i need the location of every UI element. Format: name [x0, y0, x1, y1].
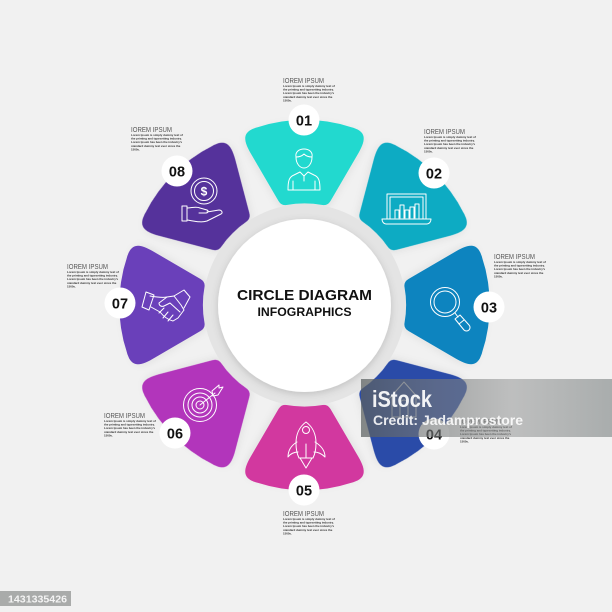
watermark logo: iStock	[372, 386, 432, 412]
text block 03: IOREM IPSUM	[494, 254, 535, 261]
text block 07: the printing and typesetting industry.	[67, 274, 118, 278]
text block 06: 1500s.	[104, 433, 113, 437]
text block 01: 1500s.	[283, 98, 292, 102]
panel: segment 07	[119, 246, 205, 364]
text block 07: 1500s.	[67, 284, 76, 288]
number badge 03: 03	[481, 300, 497, 316]
text block 01: the printing and typesetting industry.	[283, 88, 334, 92]
text block 02: standard dummy text ever since the	[424, 146, 474, 150]
number badge 01	[288, 104, 320, 136]
number badge 04: 04	[426, 428, 442, 444]
icon: house	[388, 382, 420, 417]
text block 01: standard dummy text ever since the	[283, 95, 333, 99]
icon: handshake	[142, 290, 190, 321]
panel: segment 04	[333, 334, 477, 478]
panel: segment 05	[245, 405, 364, 490]
text block 01: Lorem Ipsum is simply dummy text of	[283, 84, 335, 88]
text block 06: the printing and typesetting industry.	[104, 423, 155, 427]
text block 05	[283, 511, 335, 535]
subtitle: INFOGRAPHICS	[258, 307, 352, 319]
text block 04	[460, 419, 512, 443]
title: CIRCLE DIAGRAM	[237, 287, 372, 304]
text block 03	[494, 254, 546, 278]
panel: segment 08	[132, 132, 276, 276]
text block 04: 1500s.	[460, 439, 469, 443]
text block 02: 1500s.	[424, 149, 433, 153]
text block 05: standard dummy text ever since the	[283, 528, 333, 532]
watermark credit: Credit: Jadamprostore	[373, 413, 523, 428]
number badge 07	[104, 288, 136, 318]
icon: magnifier	[430, 288, 470, 331]
icon: rocket	[288, 422, 325, 468]
number badge 08	[162, 156, 192, 186]
icon: laptop chart	[382, 194, 431, 224]
text block 02: IOREM IPSUM	[424, 129, 465, 136]
text block 03: the printing and typesetting industry.	[494, 264, 545, 268]
centre ring	[204, 204, 406, 406]
text block 04: IOREM IPSUM	[460, 419, 501, 426]
watermark band	[361, 379, 612, 437]
text block 08: IOREM IPSUM	[131, 127, 172, 134]
text block 05: IOREM IPSUM	[283, 511, 324, 518]
text block 04: Lorem Ipsum is simply dummy text of	[460, 425, 512, 429]
number badge 08: 08	[169, 164, 185, 180]
text block 06: Lorem Ipsum has been the industry's	[104, 426, 156, 430]
number badge 05	[288, 474, 320, 506]
number badge 03	[474, 292, 504, 322]
icon: coin in hand	[182, 178, 222, 222]
text block 07: Lorem Ipsum is simply dummy text of	[67, 270, 119, 274]
text block 03: standard dummy text ever since the	[494, 271, 544, 275]
text block 08: Lorem Ipsum has been the industry's	[131, 140, 183, 144]
text block 02: Lorem Ipsum is simply dummy text of	[424, 135, 476, 139]
text block 01	[283, 78, 335, 102]
text block 08: Lorem Ipsum is simply dummy text of	[131, 133, 183, 137]
text block 07	[67, 264, 119, 288]
text block 05: Lorem Ipsum is simply dummy text of	[283, 517, 335, 521]
text block 02: the printing and typesetting industry.	[424, 139, 475, 143]
panel: segment 02	[333, 132, 477, 276]
image id tag	[0, 591, 71, 606]
text block 01: Lorem Ipsum has been the industry's	[283, 91, 335, 95]
number badge 01: 01	[296, 114, 312, 130]
centre circle	[218, 219, 391, 392]
icon: target	[184, 385, 223, 422]
text block 07: IOREM IPSUM	[67, 264, 108, 271]
text block 05: the printing and typesetting industry.	[283, 521, 334, 525]
text block 07: standard dummy text ever since the	[67, 281, 117, 285]
number badge 05: 05	[296, 484, 312, 500]
number badge 02	[418, 158, 450, 188]
panel: segment 06	[132, 334, 276, 478]
text block 04: the printing and typesetting industry.	[460, 429, 511, 433]
text block 06: Lorem Ipsum is simply dummy text of	[104, 419, 156, 423]
text block 03: Lorem Ipsum has been the industry's	[494, 267, 546, 271]
text block 06: standard dummy text ever since the	[104, 430, 154, 434]
image id tag: 1431335426	[8, 594, 67, 606]
text block 01: IOREM IPSUM	[283, 78, 324, 85]
text block 02	[424, 129, 476, 153]
number badge 07: 07	[112, 296, 128, 312]
number badge 06: 06	[167, 426, 183, 442]
text block 03: Lorem Ipsum is simply dummy text of	[494, 260, 546, 264]
text block 08: the printing and typesetting industry.	[131, 137, 182, 141]
text block 03: 1500s.	[494, 274, 503, 278]
text block 04: standard dummy text ever since the	[460, 436, 510, 440]
panel: segment 03	[404, 246, 490, 364]
text block 08: standard dummy text ever since the	[131, 144, 181, 148]
icon: dollar sign: $	[201, 184, 208, 198]
text block 05: Lorem Ipsum has been the industry's	[283, 524, 335, 528]
text block 07: Lorem Ipsum has been the industry's	[67, 277, 119, 281]
number badge 02: 02	[426, 166, 442, 182]
text block 06: IOREM IPSUM	[104, 413, 145, 420]
text block 06	[104, 413, 156, 437]
text block 05: 1500s.	[283, 531, 292, 535]
number badge 06	[160, 418, 190, 448]
text block 02: Lorem Ipsum has been the industry's	[424, 142, 476, 146]
icon: person	[288, 149, 320, 190]
text block 08: 1500s.	[131, 147, 140, 151]
number badge 04	[418, 418, 450, 450]
text block 08	[131, 127, 183, 151]
panel: segment 01	[245, 120, 364, 205]
text block 04: Lorem Ipsum has been the industry's	[460, 432, 512, 436]
